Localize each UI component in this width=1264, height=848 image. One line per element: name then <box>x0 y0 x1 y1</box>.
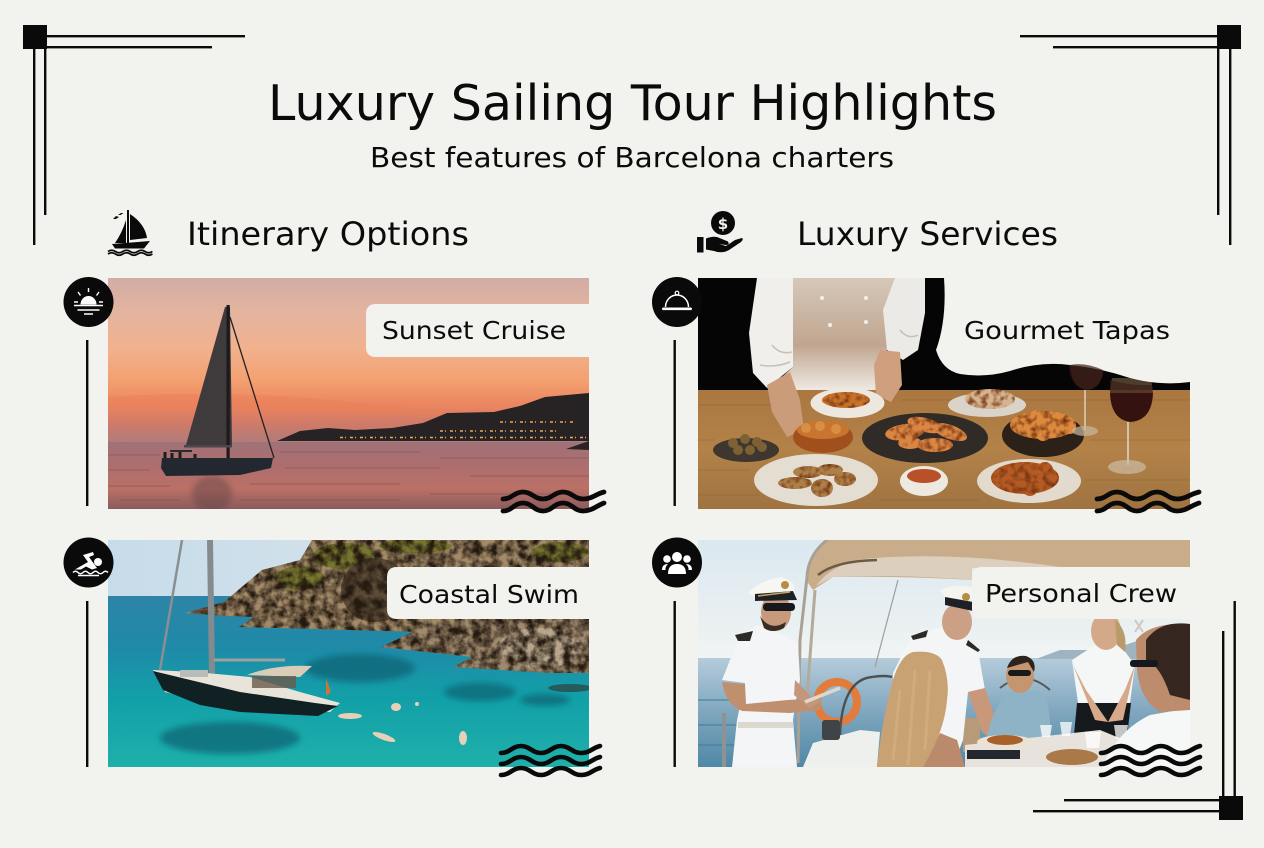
corner ornament: top right <box>1020 25 1241 245</box>
table with food <box>965 730 1120 767</box>
connector line: coastal swim <box>86 601 88 767</box>
photo: crew serving guests on deck <box>698 539 1190 767</box>
corner ornament: bottom right <box>1033 601 1243 820</box>
crew member centre <box>893 628 985 750</box>
label: Coastal Swim: Coastal Swim <box>399 580 579 609</box>
crew member right <box>1072 645 1135 703</box>
subtitle: Best features of Barcelona charters <box>370 141 894 174</box>
heading: Luxury Services: Luxury Services <box>797 215 1058 253</box>
label: Coastal Swim <box>387 567 589 619</box>
icon badge: crew group <box>652 538 702 588</box>
icon: sailboat <box>108 210 152 255</box>
guest with blonde hair <box>922 733 965 767</box>
waves ornament <box>1101 746 1200 775</box>
title: Luxury Sailing Tour Highlights <box>268 75 997 132</box>
label: Sunset Cruise: Sunset Cruise <box>382 316 566 345</box>
canopy <box>806 539 1190 590</box>
label: Personal Crew: Personal Crew <box>985 579 1177 608</box>
connector line: sunset cruise <box>86 340 88 506</box>
waves ornament <box>501 746 600 775</box>
panel: sunset cruise <box>108 278 604 512</box>
icon badge: swimmer <box>64 538 114 588</box>
lifebuoy and helm <box>817 682 857 722</box>
guest in foreground <box>1102 708 1190 767</box>
connector line: gourmet tapas <box>674 340 676 506</box>
wine glass rims over cutout edge <box>1070 364 1153 393</box>
icon: hand holding coin: $ <box>718 215 728 233</box>
icon badge: cloche <box>652 277 702 327</box>
panel: gourmet tapas <box>698 278 1199 511</box>
wave cutout holding label <box>936 278 1190 383</box>
label: Gourmet Tapas: Gourmet Tapas <box>964 316 1170 345</box>
icon: hand holding coin <box>697 211 743 252</box>
deck seats <box>803 730 880 767</box>
panel: coastal swim <box>108 539 600 775</box>
connector line: personal crew <box>674 601 676 767</box>
crew member left <box>722 625 800 767</box>
photo: chef serving tapas <box>698 278 1190 509</box>
icon badge: sunset <box>64 277 114 327</box>
waves ornament <box>1097 492 1199 511</box>
photo: yacht in turquoise cove <box>108 539 592 767</box>
label: Sunset Cruise <box>366 304 589 357</box>
corner ornament: top left <box>23 25 245 245</box>
panel: personal crew <box>698 539 1200 775</box>
label: Personal Crew <box>972 567 1190 619</box>
photo: sailboat at sunset <box>108 278 589 512</box>
heading: Itinerary Options: Itinerary Options <box>187 215 469 253</box>
seated guest <box>988 704 1050 738</box>
waves ornament <box>503 492 604 511</box>
